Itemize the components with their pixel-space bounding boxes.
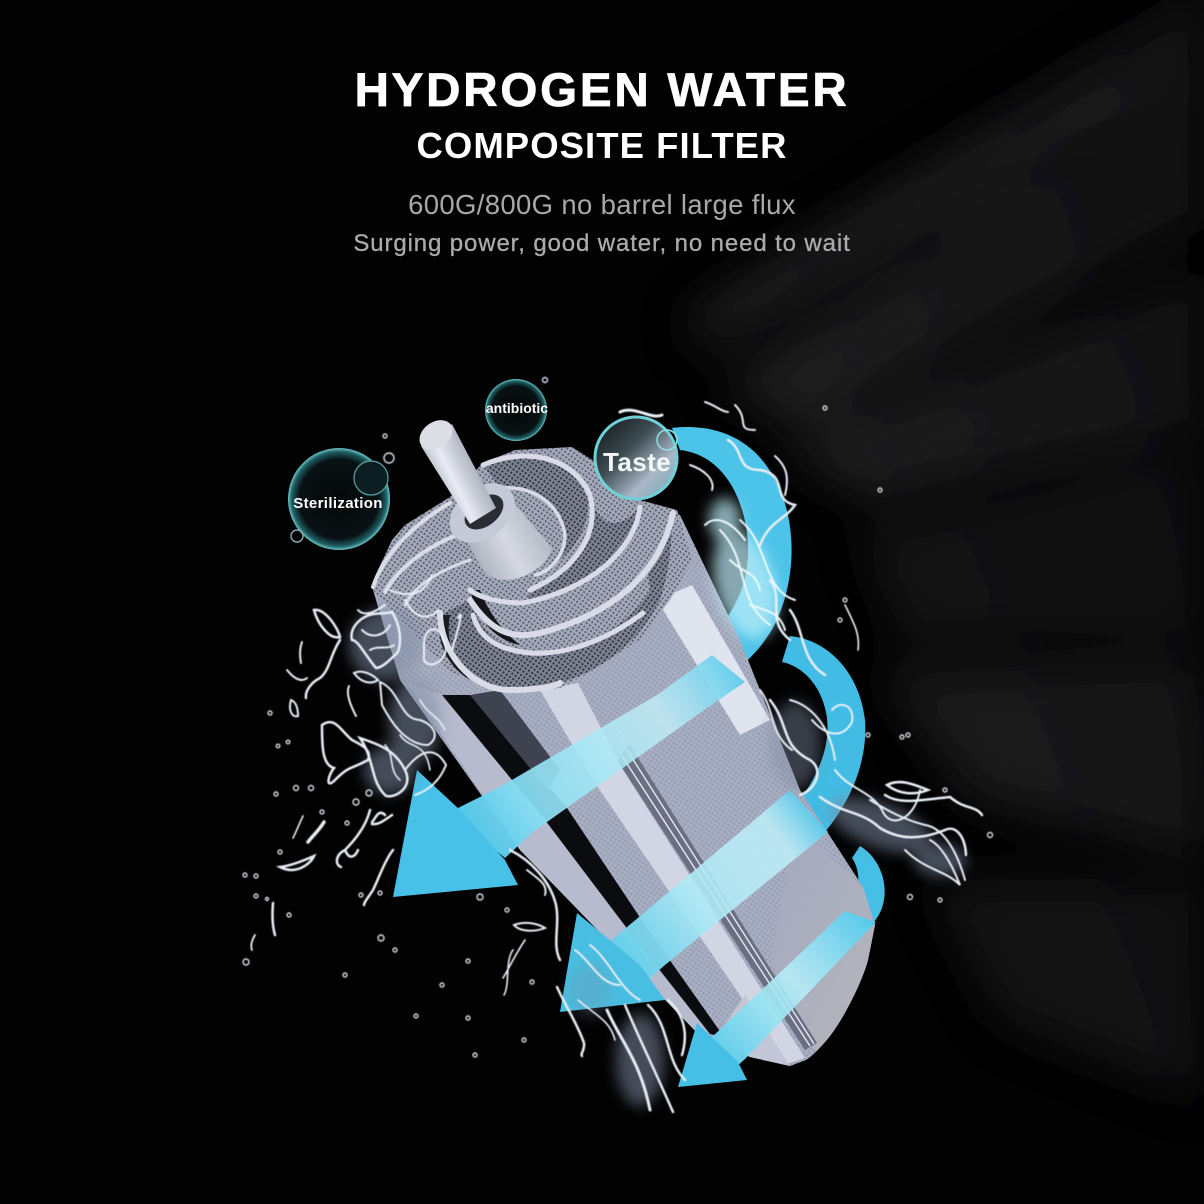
- bubble: taste: [595, 417, 677, 499]
- arrowhead: bottom: [678, 1023, 747, 1087]
- swirl band: middle: [600, 790, 828, 1000]
- filter body: [373, 500, 875, 1066]
- water splash: bottom: [510, 850, 685, 1112]
- water splash: left: [243, 575, 534, 1057]
- water splash: right: [383, 378, 992, 902]
- swirl band: lower: [700, 911, 876, 1068]
- swirl band: upper: [450, 655, 745, 858]
- bubble: sterilization: Sterilization: [293, 495, 383, 512]
- subtitle: COMPOSITE FILTER: [416, 125, 787, 166]
- arrowhead: left: [393, 770, 518, 897]
- title: HYDROGEN WATER: [355, 64, 849, 117]
- bubble: antibiotic: [485, 379, 548, 441]
- arrow arc: upper right: [672, 427, 792, 684]
- bubble: sterilization: [288, 448, 390, 550]
- arrowhead: lower: [560, 913, 665, 1012]
- small droplets around left splash: [243, 711, 534, 1057]
- arrow arc: middle right: [782, 636, 865, 832]
- center pipe and collar: [414, 414, 552, 580]
- tagline: flux: 600G/800G no barrel large flux: [408, 189, 796, 220]
- tagline: surging power: Surging power, good water, no need to wait: [353, 230, 851, 257]
- bubble: antibiotic: antibiotic: [486, 400, 548, 416]
- arrow arc: lower right: [848, 846, 885, 922]
- water haze: soft splash glow: [349, 498, 966, 1106]
- bubble: taste: Taste: [603, 447, 671, 477]
- spiral end cap: [373, 447, 692, 692]
